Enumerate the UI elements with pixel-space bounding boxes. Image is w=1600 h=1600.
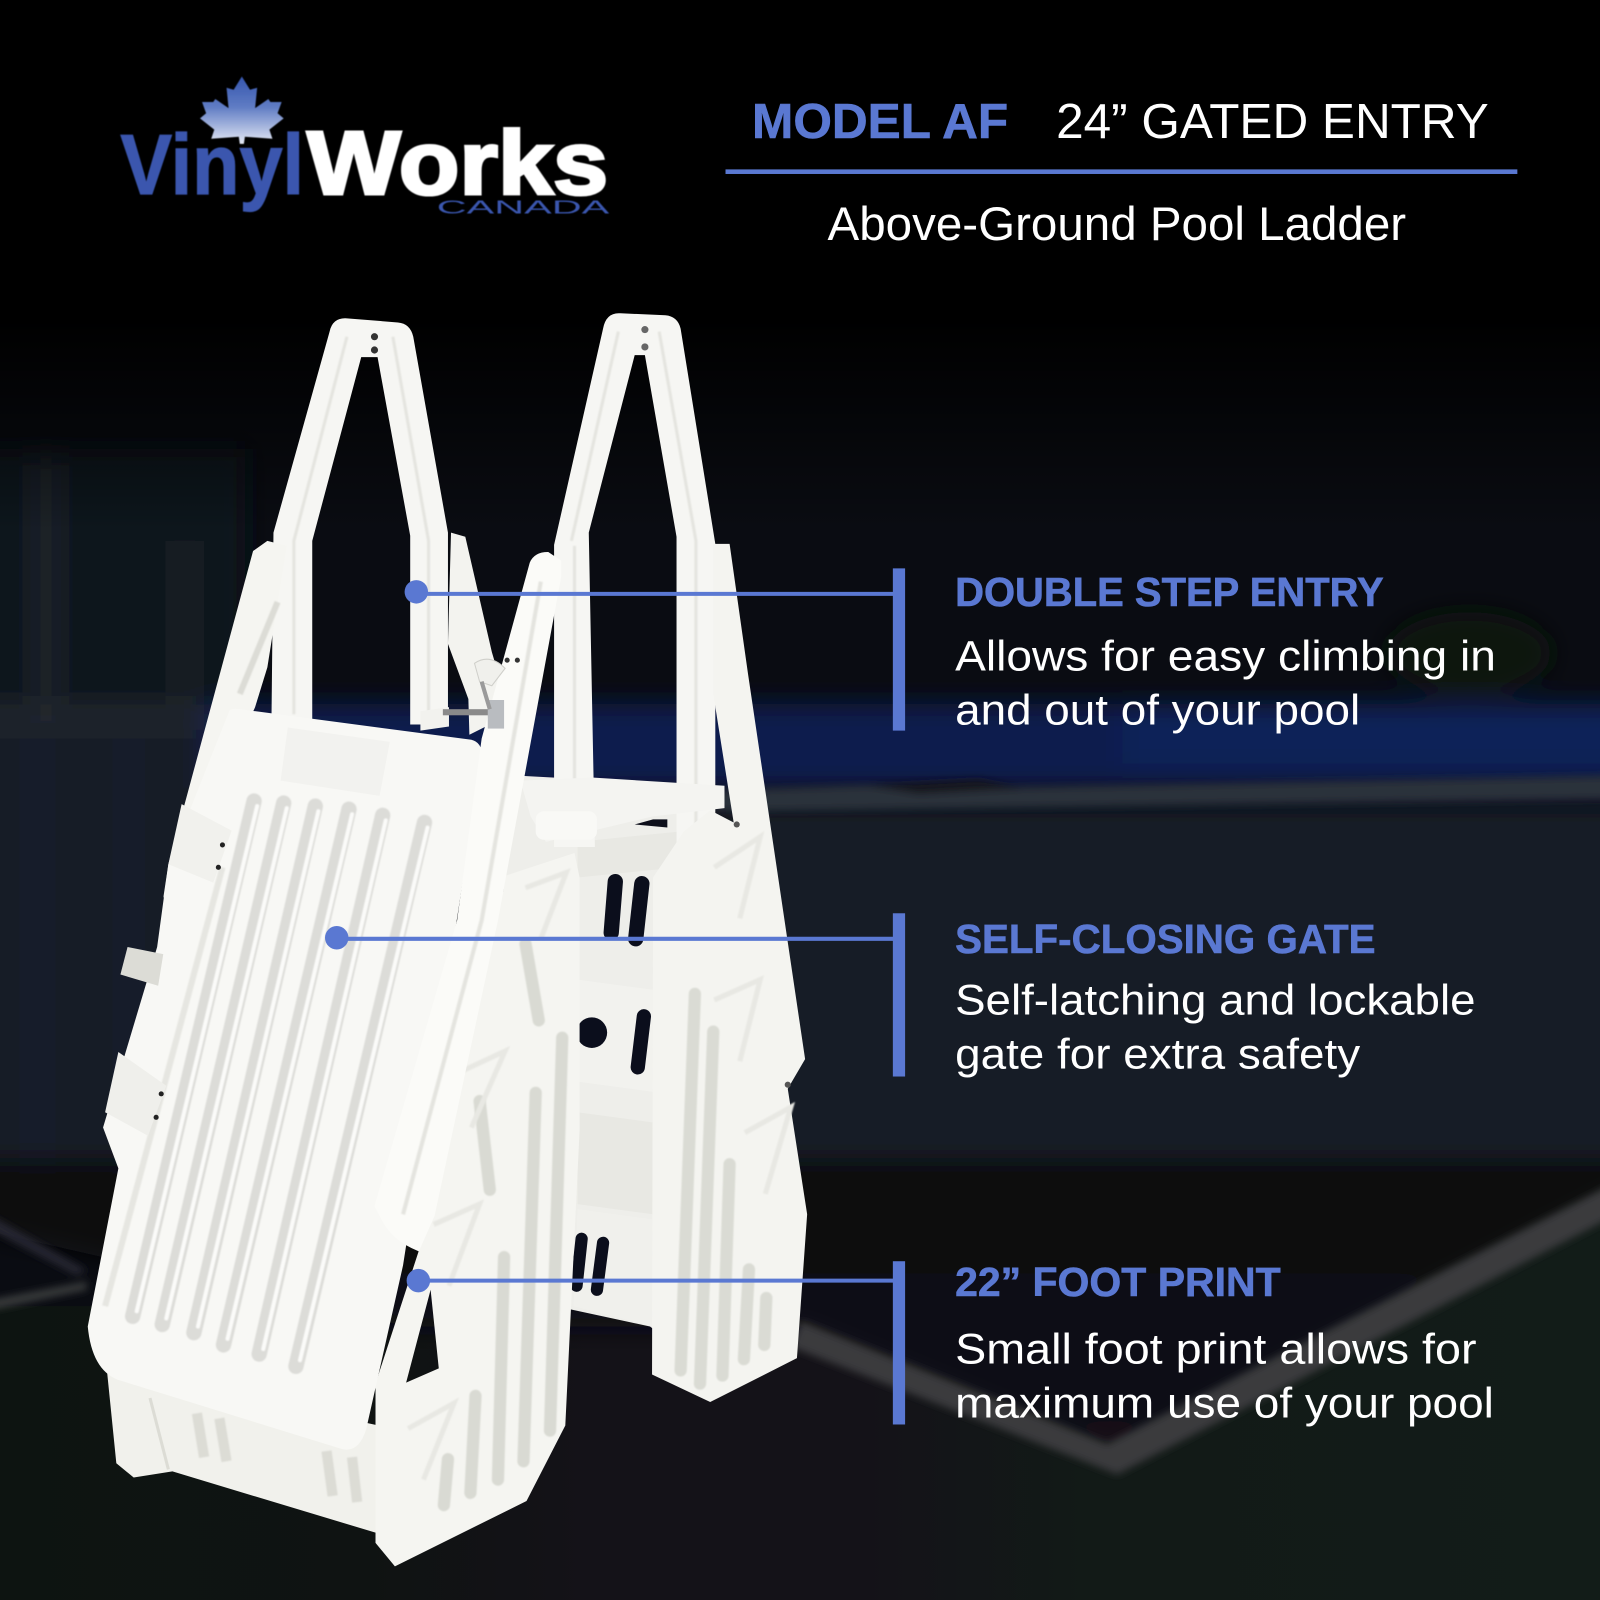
ladder: under-gate base and foot — [107, 1372, 393, 1533]
callout heading: SELF-CLOSING GATE — [955, 916, 1376, 962]
subtitle: Above-Ground Pool Ladder — [828, 198, 1406, 250]
callout: foot print — [407, 1259, 1494, 1427]
ladder: front side panel — [376, 853, 580, 1566]
ladder: rear left brace — [448, 533, 510, 735]
pointer dot and leader line — [405, 568, 905, 731]
title block — [726, 95, 1517, 250]
ladder: gate front rail — [376, 553, 560, 1250]
logo wordmark: Canada: CANADA — [437, 196, 611, 217]
callout: double step entry — [405, 568, 1496, 734]
callout body: maximum use of your pool — [955, 1379, 1494, 1427]
product photo: white gated pool ladder — [88, 313, 807, 1566]
callout body: and out of your pool — [955, 686, 1360, 734]
ladder: right side panel — [652, 544, 807, 1402]
logo wordmark: Vinyl: Vinyl — [120, 117, 304, 213]
ladder: left arch handrail — [271, 318, 448, 724]
ladder: front gate panel with vertical slots — [88, 709, 482, 1450]
pointer dot and leader line — [407, 1261, 905, 1424]
heading: gated entry: 24” GATED ENTRY — [1056, 95, 1489, 149]
callout body: gate for extra safety — [955, 1030, 1361, 1078]
callout heading: 22” FOOT PRINT — [955, 1259, 1281, 1305]
icon: maple leaf — [200, 77, 284, 144]
callout body: Small foot print allows for — [955, 1325, 1477, 1373]
ladder: left side brace — [163, 541, 287, 898]
callout body: Allows for easy climbing in — [955, 632, 1496, 680]
logo wordmark: Works: Works — [307, 114, 608, 214]
heading: model: MODEL AF — [752, 95, 1008, 149]
ladder: gate hinges, knob and latch — [105, 658, 520, 1136]
ladder: right arch handrail — [554, 313, 715, 847]
callout: self-closing gate — [325, 913, 1476, 1078]
logo: VinylWorks Canada — [120, 77, 611, 217]
callout body: Self-latching and lockable — [955, 976, 1476, 1024]
pointer dot and leader line — [325, 913, 905, 1077]
ladder: top step platform — [520, 778, 724, 842]
callout heading: DOUBLE STEP ENTRY — [955, 569, 1384, 615]
ladder: middle stair block — [480, 776, 704, 1367]
